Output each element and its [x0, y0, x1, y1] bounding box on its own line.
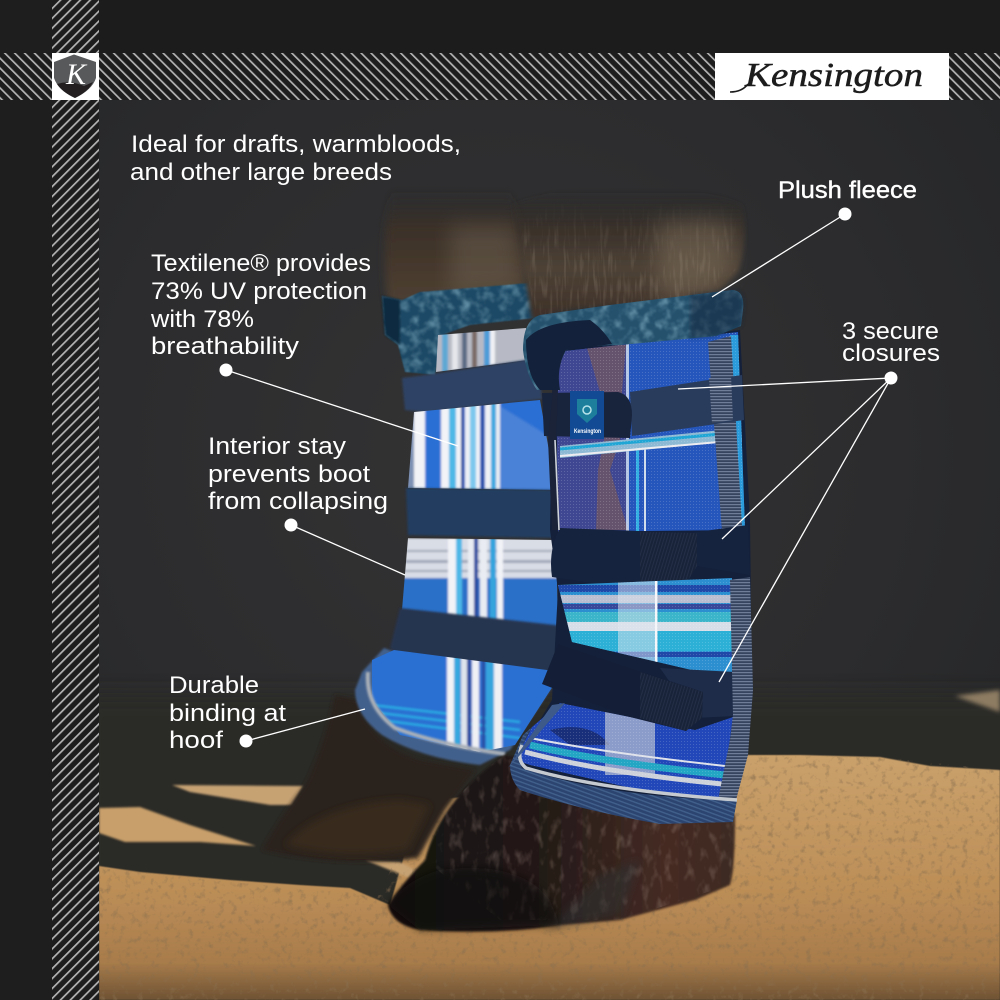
front boot vertical binding over strap	[709, 375, 733, 423]
label: durable binding: Durable	[169, 672, 259, 699]
front boot vertical binding upper	[708, 336, 742, 532]
front hoof	[388, 755, 735, 932]
front boot lower mesh	[555, 575, 735, 675]
label: 3 secure closures	[678, 318, 940, 682]
back leg hair	[385, 190, 525, 305]
front leg	[388, 185, 753, 932]
label: textilene: Textilene® provides	[151, 250, 371, 277]
label: durable binding: hoof	[169, 727, 223, 754]
back hoof	[262, 695, 475, 862]
icon: K shield logo	[52, 53, 99, 100]
icon: K shield logo: K	[65, 58, 88, 91]
back leg	[262, 190, 565, 862]
label: interior stay: Interior stay	[208, 433, 346, 460]
vertical hatch band	[52, 0, 99, 1000]
label: textilene: with 78%	[150, 306, 254, 333]
label: durable binding	[169, 672, 365, 754]
left column	[0, 0, 52, 1000]
brand tag	[570, 391, 604, 439]
label: interior stay: prevents boot	[208, 461, 370, 488]
back boot middle mesh	[408, 400, 550, 490]
label: 3 secure closures: 3 secure	[842, 318, 939, 345]
top band	[0, 0, 1000, 53]
photo background: ground shadow	[80, 695, 1000, 1000]
label: 3 secure closures: closures	[842, 340, 940, 367]
back boot upper mesh	[436, 328, 526, 372]
label: textilene	[150, 250, 458, 446]
back boot third strap	[390, 608, 564, 672]
label: textilene: breathability	[151, 333, 299, 360]
front boot fleece	[523, 288, 745, 392]
front boot upper mesh	[556, 332, 745, 532]
front boot third strap	[542, 644, 735, 731]
heading: ideal for: Ideal for drafts, warmbloods,	[131, 131, 461, 158]
brand tag: Kensington	[574, 429, 601, 435]
label: textilene: 73% UV protection	[151, 278, 367, 305]
back boot top strap	[402, 358, 542, 412]
front boot side flap	[548, 390, 560, 530]
heading: ideal for	[130, 131, 461, 186]
front boot top strap	[542, 375, 744, 439]
back boot bottom mesh	[372, 650, 552, 752]
label: interior stay: from collapsing	[208, 488, 388, 515]
logo: Kensington wordmark	[715, 53, 949, 100]
front leg hair	[519, 207, 746, 318]
front boot bottom mesh	[522, 703, 733, 797]
label: durable binding: binding at	[169, 700, 286, 727]
label: plush fleece: Plush fleece	[778, 177, 917, 204]
logo: Kensington wordmark: Kensington	[744, 57, 923, 94]
front boot second strap	[551, 525, 750, 592]
horizontal hatch band	[0, 53, 1000, 100]
back boot lower mesh	[402, 538, 558, 627]
back boot bottom binding	[355, 648, 560, 765]
back boot fleece	[380, 280, 540, 378]
photo background: sand	[99, 690, 1000, 1000]
back boot binding stripe	[368, 672, 505, 754]
front boot back lining	[510, 330, 752, 815]
front boot bottom binding	[510, 727, 737, 824]
front boot vertical binding lower	[718, 577, 753, 800]
back boot second strap	[406, 488, 558, 538]
heading: ideal for: and other large breeds	[130, 159, 392, 186]
label: plush fleece	[712, 177, 917, 297]
label: interior stay	[208, 433, 405, 575]
